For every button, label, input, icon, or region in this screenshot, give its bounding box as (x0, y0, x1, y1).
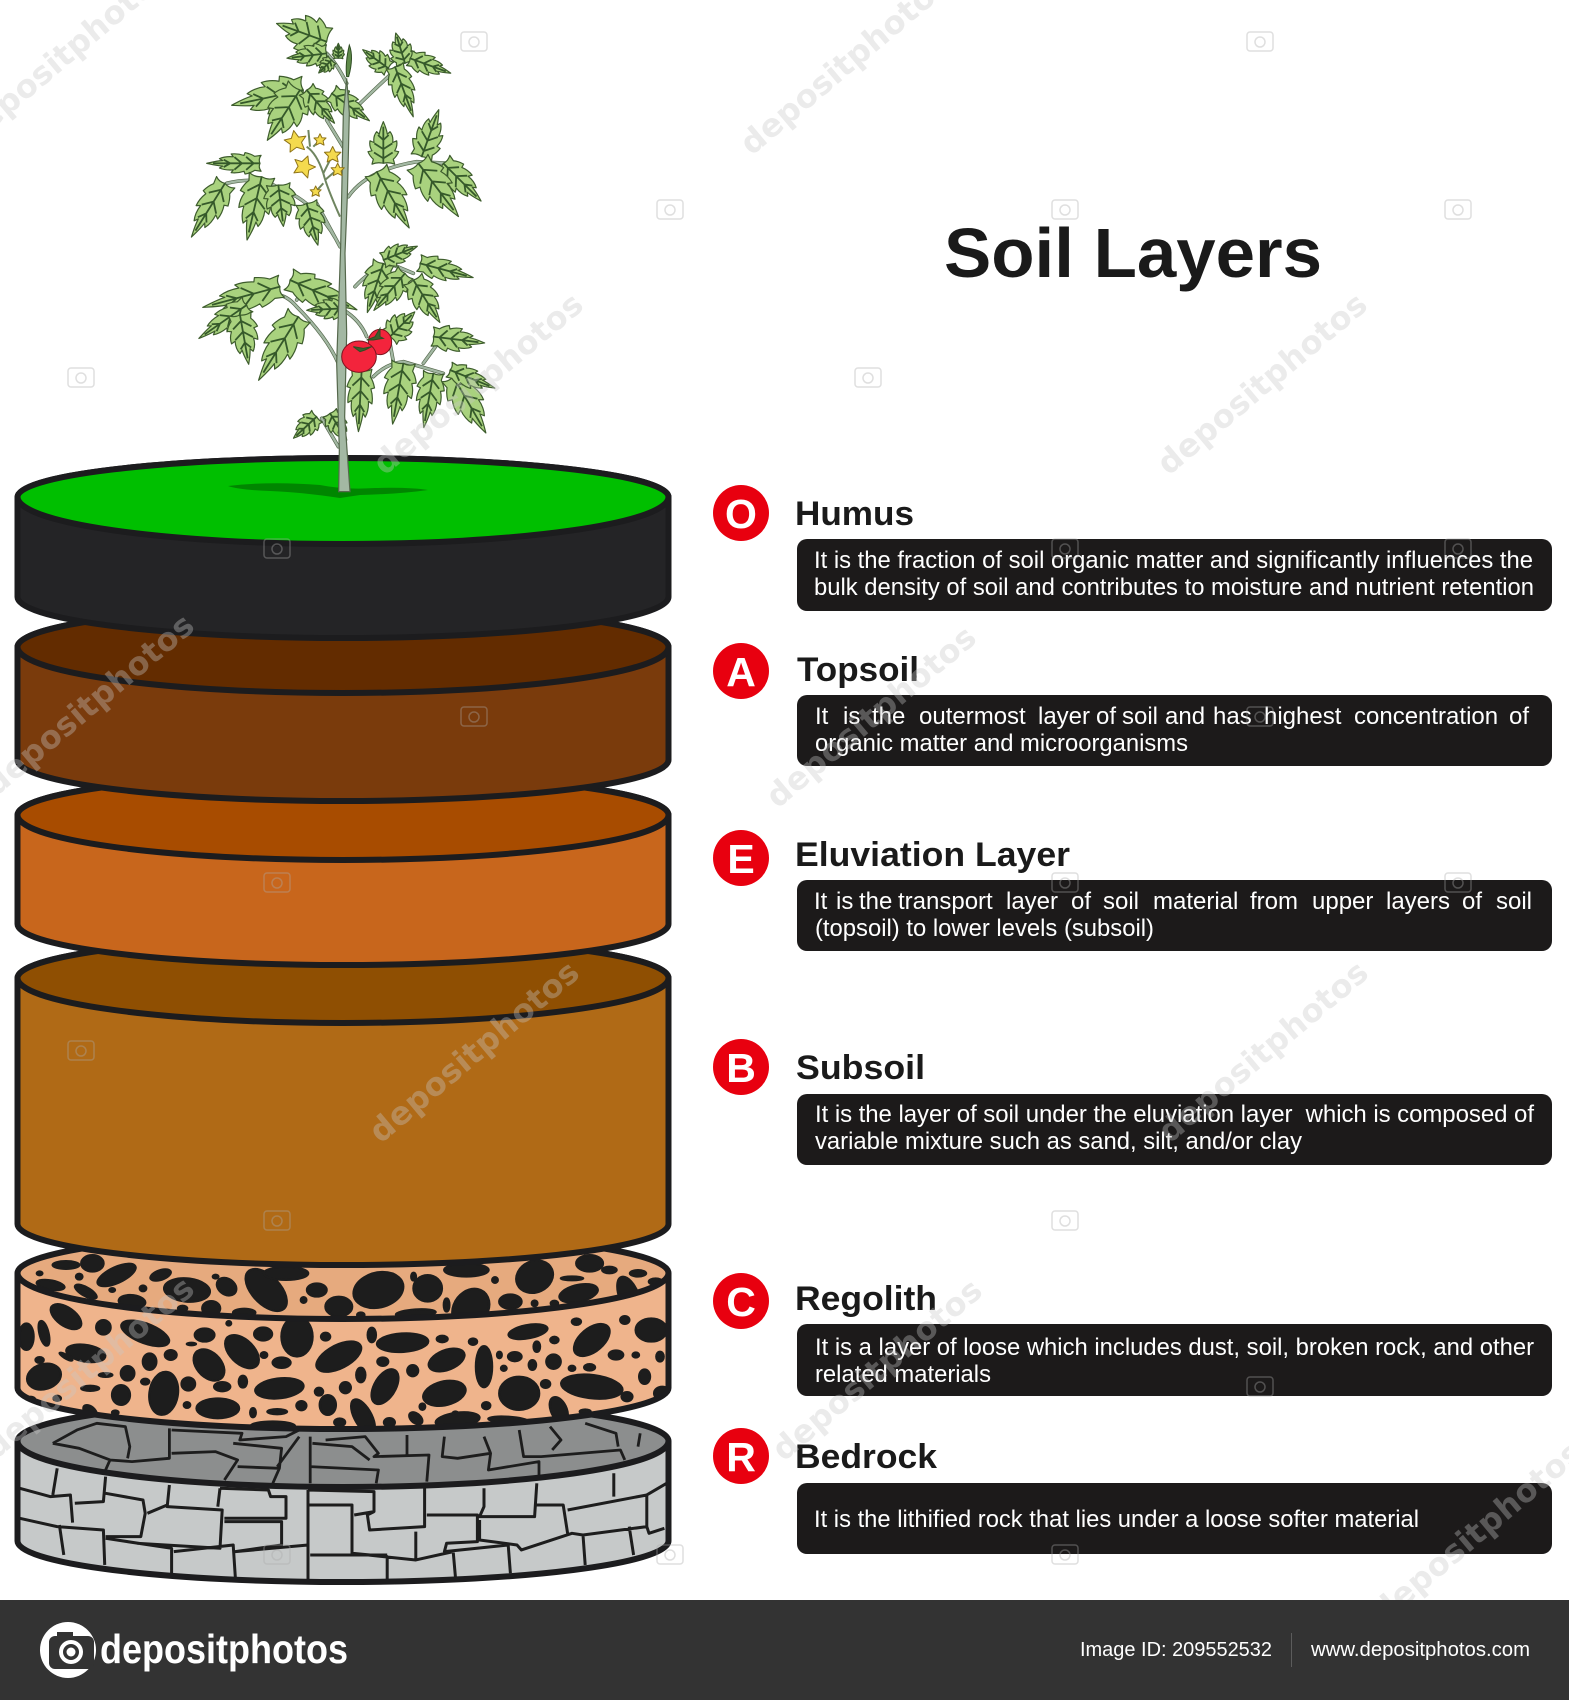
item: A Topsoil: of (1509, 703, 1529, 730)
item: E Eluviation Layer: of (1071, 888, 1091, 915)
item: A Topsoil: organic matter and microorganisms (815, 730, 1188, 757)
plant shadow (228, 483, 428, 498)
item: A Topsoil: outermost (919, 703, 1026, 730)
layer A: topsoil (18, 606, 668, 801)
item: A Topsoil: is (843, 703, 860, 730)
item: E Eluviation Layer: Eluviation Layer (795, 836, 1070, 874)
item: C Regolith: Regolith (795, 1280, 937, 1318)
image id: Image ID: 209552532 (1080, 1639, 1272, 1661)
footer bar (0, 1600, 1569, 1700)
item: A Topsoil: A (726, 649, 756, 695)
item: A Topsoil: layer (1038, 703, 1090, 730)
item: B Subsoil: Subsoil (796, 1049, 925, 1087)
tomatoes (342, 328, 392, 372)
watermarks: depositphotos (365, 285, 590, 482)
item: E Eluviation Layer: the (859, 888, 892, 915)
main stem (337, 78, 350, 492)
item: E Eluviation Layer: soil (1496, 888, 1532, 915)
layer C: regolith (18, 1232, 670, 1436)
title: Soil Layers (944, 214, 1322, 292)
item: O Humus: O (725, 491, 757, 537)
item: C Regolith: related materials (815, 1361, 991, 1388)
item: E Eluviation Layer: layers (1386, 888, 1450, 915)
item: R Bedrock: It is the lithified rock that lies under a loose softer material (814, 1506, 1419, 1533)
item: C Regolith: C (726, 1279, 756, 1325)
leaves (179, 5, 500, 446)
item: E Eluviation Layer: It (814, 888, 828, 915)
tomato plant (179, 5, 500, 492)
item: A Topsoil: It (815, 703, 829, 730)
website: www.depositphotos.com (1310, 1639, 1530, 1661)
watermarks: depositphotos (764, 1271, 989, 1468)
watermarks: depositphotos (758, 618, 983, 815)
item: A Topsoil: has (1213, 703, 1252, 730)
top shoot (346, 45, 352, 77)
item: A Topsoil: Topsoil (797, 651, 919, 689)
item: E Eluviation Layer: transport (898, 888, 993, 915)
item: A Topsoil: and (1165, 703, 1205, 730)
item: A Topsoil (713, 643, 1552, 766)
item: E Eluviation Layer: soil (1103, 888, 1139, 915)
soil column (18, 458, 670, 1582)
item: R Bedrock: Bedrock (795, 1438, 937, 1476)
item: E Eluviation Layer: upper (1312, 888, 1373, 915)
icon: camera logo (40, 1622, 96, 1678)
item: E Eluviation Layer: (topsoil) to lower levels (subsoil) (815, 915, 1154, 942)
item: B Subsoil: B (726, 1045, 756, 1091)
layer B: subsoil (18, 937, 668, 1265)
item: A Topsoil: highest (1264, 703, 1342, 730)
watermarks: depositphotos (1149, 285, 1374, 482)
item: C Regolith: It is a layer of loose which includes dust, soil, broken rock, and other (815, 1334, 1534, 1361)
plant stems (227, 53, 450, 447)
item: E Eluviation Layer (713, 830, 1552, 951)
item: E Eluviation Layer: layer (1006, 888, 1058, 915)
item: E Eluviation Layer: E (727, 836, 755, 882)
item: B Subsoil: variable mixture such as sand, silt, and/or clay (815, 1128, 1302, 1155)
watermarks: depositphotos (361, 953, 586, 1150)
item: A Topsoil: the (872, 703, 905, 730)
item: A Topsoil: concentration (1354, 703, 1498, 730)
item: A Topsoil: soil (1122, 703, 1158, 730)
item: A Topsoil: of (1096, 703, 1116, 730)
item: B Subsoil (713, 1039, 1552, 1165)
item: E Eluviation Layer: of (1462, 888, 1482, 915)
layer O: humus (18, 458, 668, 638)
item: R Bedrock: R (726, 1434, 756, 1480)
item: C Regolith (713, 1273, 1552, 1396)
logo text: depositphotos (100, 1626, 348, 1672)
item: O Humus (713, 485, 1552, 611)
watermarks: depositphotos (1150, 953, 1375, 1150)
item: O Humus: It is the fraction of soil organic matter and significantly influences the (814, 547, 1533, 574)
item: O Humus: bulk density of soil and contributes to moisture and nutrient retention (814, 574, 1534, 601)
flowers (283, 129, 344, 217)
item: O Humus: Humus (795, 495, 914, 533)
layer E: eluviation (18, 774, 668, 965)
item: B Subsoil: It is the layer of soil under the eluviation layer which is composed of (815, 1101, 1534, 1128)
item: E Eluviation Layer: from (1250, 888, 1298, 915)
item: E Eluviation Layer: is (836, 888, 853, 915)
item: R Bedrock (713, 1428, 1552, 1554)
layer R: bedrock (18, 1400, 668, 1582)
item: E Eluviation Layer: material (1153, 888, 1238, 915)
